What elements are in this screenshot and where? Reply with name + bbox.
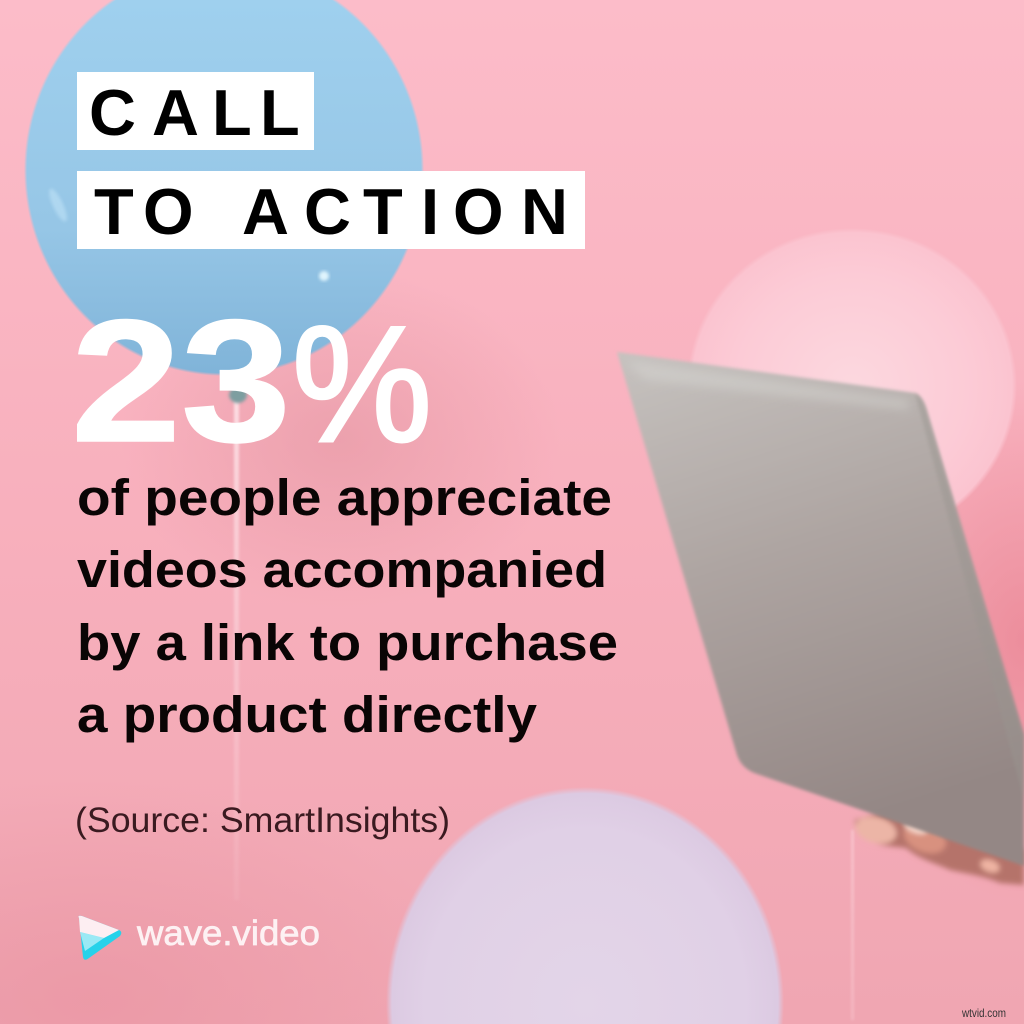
balloon strings [234, 400, 854, 1020]
body text: a product directly [77, 686, 538, 743]
body text: by a link to purchase [77, 614, 618, 671]
heading: CALL: CALL [89, 76, 300, 149]
statistic: 23%: % [292, 292, 432, 476]
balloon: blue [20, 0, 428, 403]
balloon: pale pink [685, 226, 1019, 546]
laptop top highlight [625, 360, 910, 410]
body text [77, 469, 618, 743]
source note: (Source: SmartInsights) [75, 801, 450, 840]
laptop side edge [915, 393, 1024, 800]
laptop [617, 352, 1024, 866]
statistic: 23%: 23 [71, 283, 291, 478]
watermark: wtvid.com [961, 1006, 1006, 1020]
wordmark: wave.video [136, 914, 320, 953]
balloon: lavender [384, 785, 786, 1024]
statistic: 23% [71, 283, 432, 478]
logo: wave.video [78, 914, 320, 960]
body text: of people appreciate [77, 469, 612, 526]
heading: TO ACTION: TO ACTION [94, 175, 568, 248]
icon: play triangle [78, 916, 121, 960]
body text: videos accompanied [77, 541, 607, 598]
hand holding the laptop [852, 805, 1024, 885]
